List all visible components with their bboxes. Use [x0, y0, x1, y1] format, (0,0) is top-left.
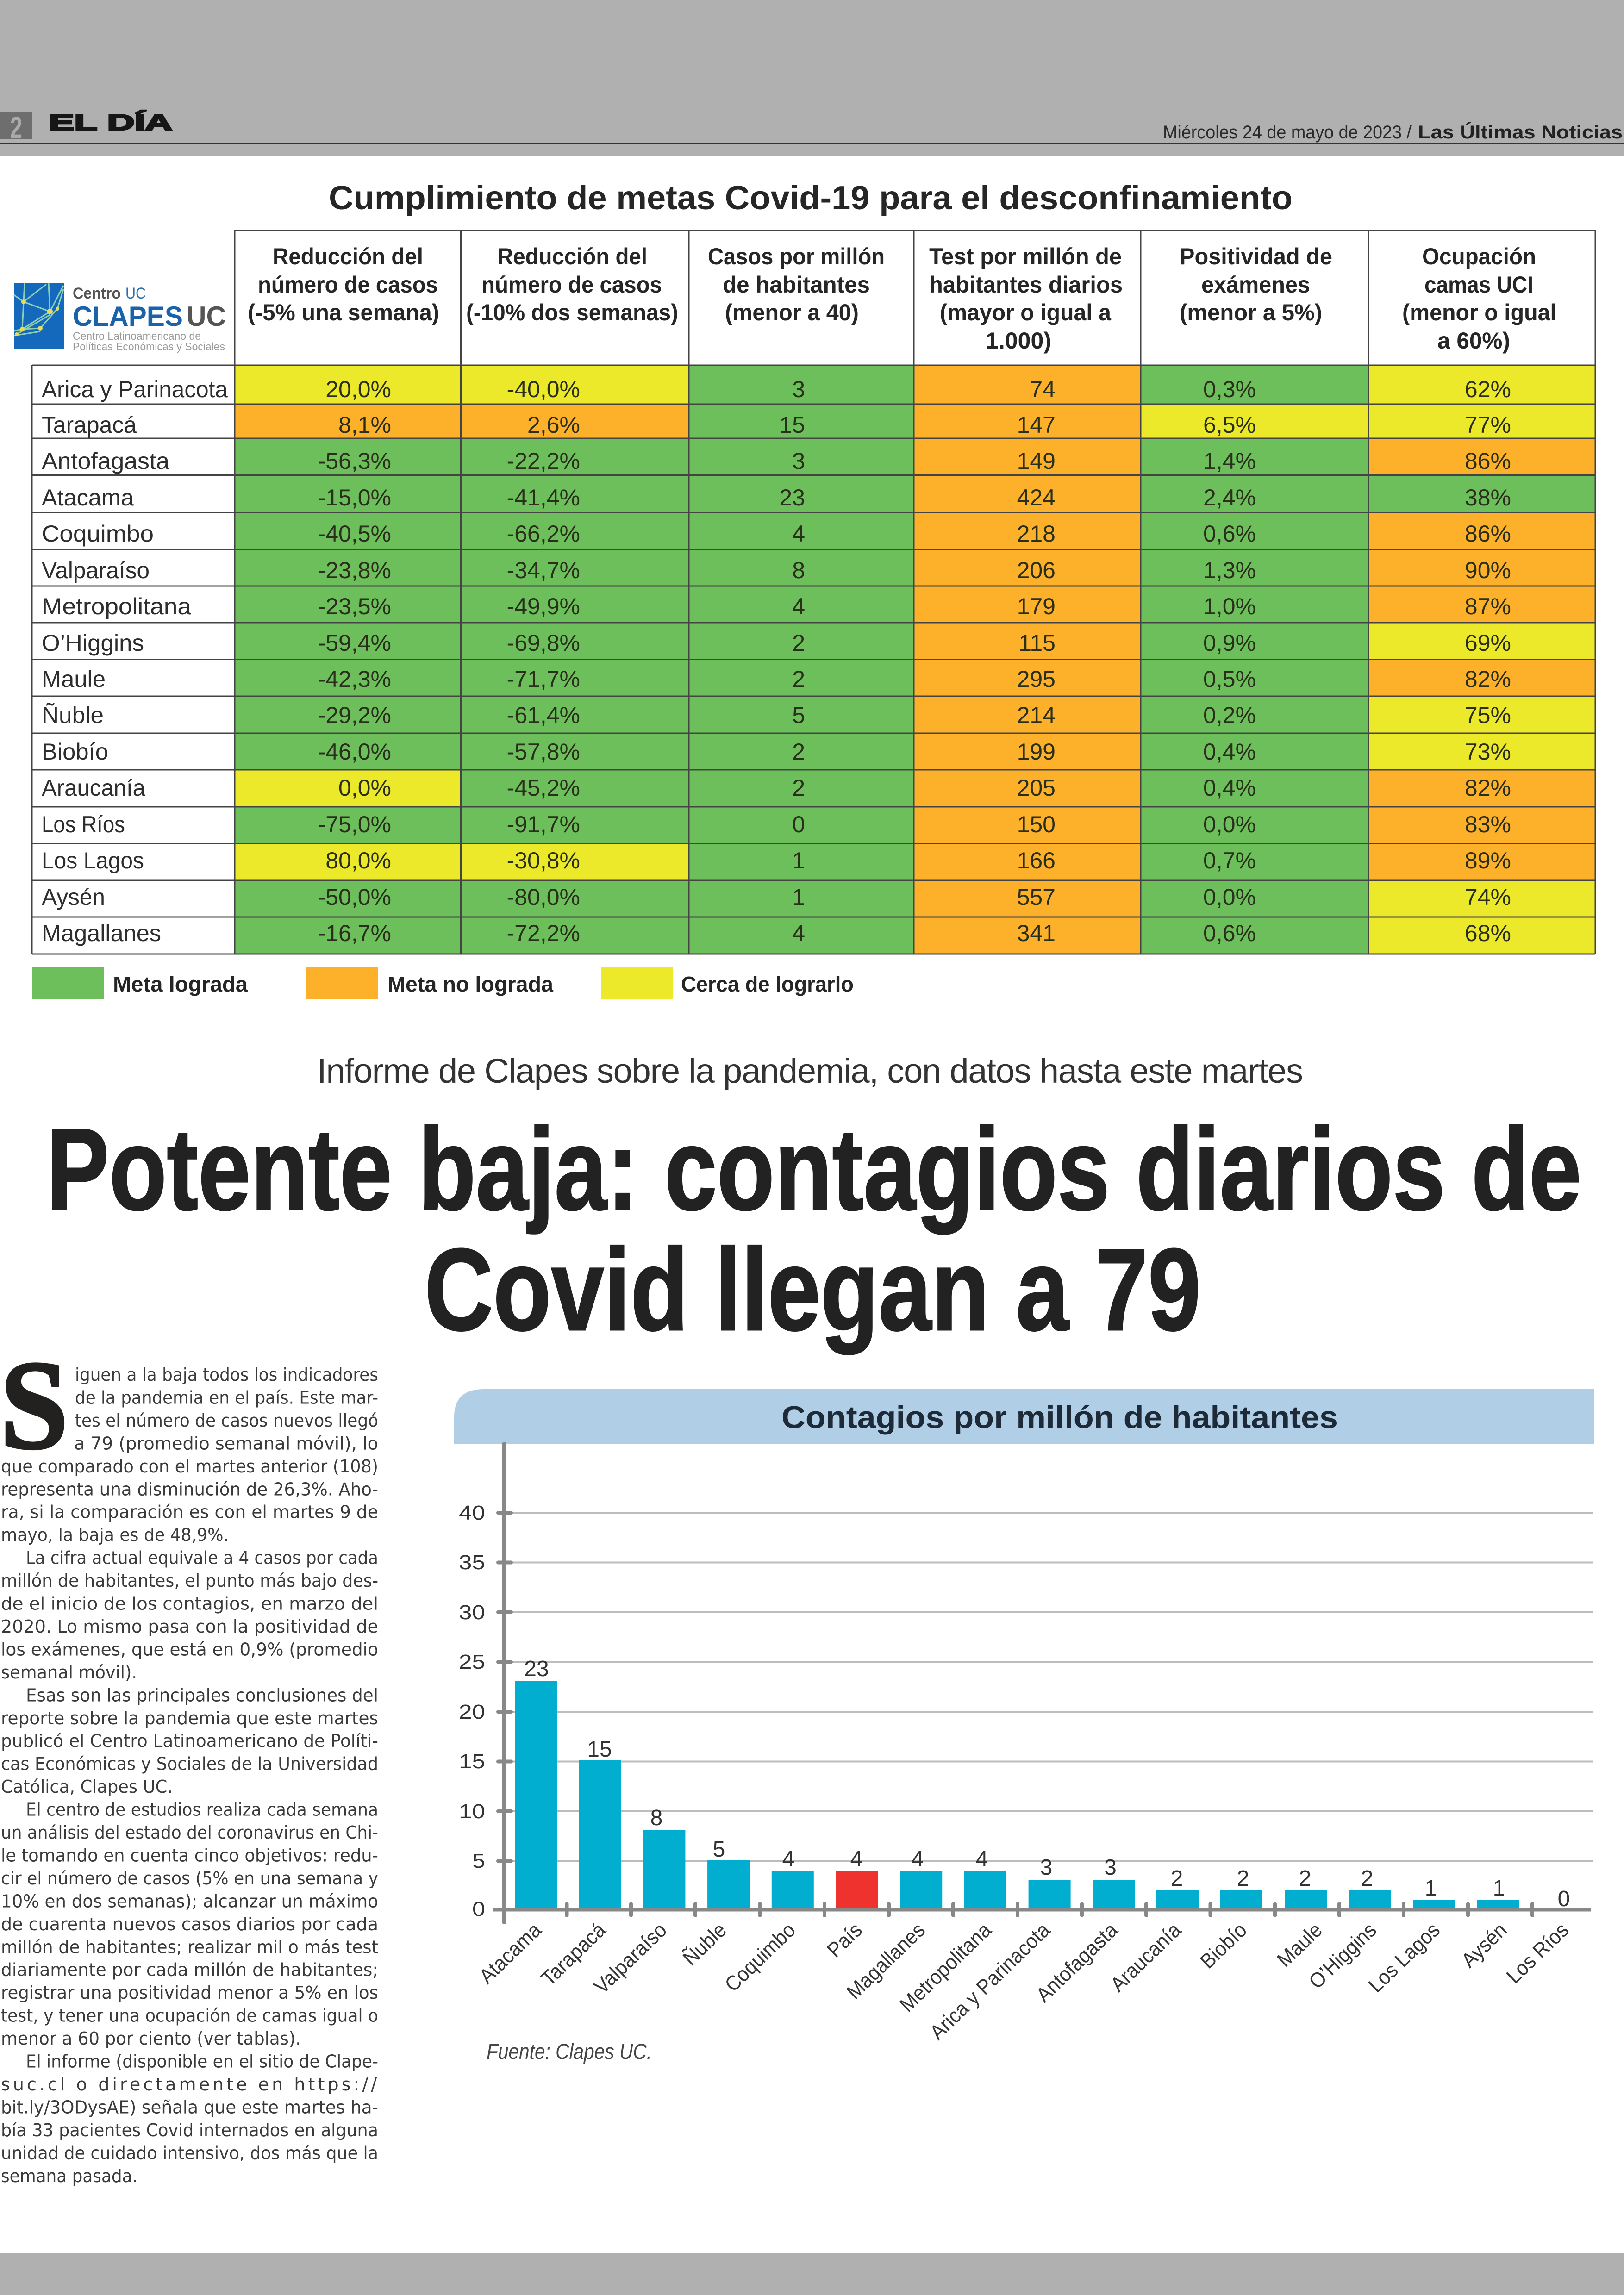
x axis category labels: País [823, 1919, 867, 1962]
header: casos por millón: Casos por millón [708, 243, 885, 269]
row: Coquimbo: -40,5% [318, 521, 391, 547]
row: Magallanes: Magallanes [42, 920, 161, 946]
logo text: Centro [73, 285, 121, 302]
bar value labels: 4 [782, 1847, 794, 1871]
date and newspaper: Miércoles 24 de mayo de 2023 / [1163, 122, 1412, 143]
article text: cir el número de casos (5% en una semana y [1, 1868, 378, 1889]
x axis category labels: Los Ríos [1502, 1919, 1573, 1988]
article text: unidad de cuidado intensivo, dos más que la [1, 2143, 378, 2163]
y axis labels: 15 [459, 1750, 485, 1773]
header: ocupación UCI: camas UCI [1424, 272, 1533, 298]
row: Biobío [42, 733, 1595, 770]
row: Ñuble: 75% [1465, 702, 1511, 728]
bar value labels: 3 [1104, 1855, 1117, 1880]
row: Maule [42, 659, 1595, 696]
row: Arica y Parinacota: 74 [1030, 376, 1056, 402]
row: Tarapacá: 15 [779, 412, 805, 438]
row: Maule: 82% [1465, 666, 1511, 692]
bar value labels: 4 [912, 1847, 924, 1871]
legend: meta no lograda [306, 967, 553, 999]
row: Valparaíso: 1,3% [1203, 557, 1256, 583]
row: Arica y Parinacota: 62% [1465, 376, 1511, 402]
bar value labels: 4 [976, 1847, 988, 1871]
bar value labels: 23 [524, 1657, 549, 1681]
bar value labels: 3 [1040, 1855, 1052, 1880]
row: Aysén: 74% [1465, 884, 1511, 910]
article text: El centro de estudios realiza cada semana [26, 1800, 378, 1820]
logo text [73, 285, 226, 353]
row: Arica y Parinacota: 20,0% [325, 376, 391, 402]
article text: tes el número de casos nuevos llegó [75, 1410, 378, 1431]
row: Aysén: 0,0% [1203, 884, 1256, 910]
article text: un análisis del estado del coronavirus en Chi- [1, 1822, 378, 1843]
article text: 2020. Lo mismo pasa con la positividad de [1, 1616, 378, 1637]
row: Biobío: -46,0% [318, 739, 391, 765]
row: Coquimbo: -66,2% [507, 521, 580, 547]
bar value labels: 15 [587, 1737, 612, 1762]
row: Araucanía [42, 770, 1595, 807]
x axis category labels: Biobío [1196, 1919, 1251, 1973]
row: O'Higgins: O’Higgins [42, 630, 144, 656]
legend: meta lograda: Meta lograda [113, 972, 248, 996]
row: Los Ríos: 0 [792, 811, 805, 837]
row: Tarapacá: 147 [1017, 412, 1056, 438]
row: Valparaíso: 8 [792, 557, 805, 583]
bar value labels: 1 [1425, 1876, 1437, 1901]
y axis labels: 25 [459, 1651, 485, 1673]
row: Arica y Parinacota [42, 365, 1595, 404]
header: test por millón: habitantes diarios [929, 272, 1123, 298]
row: Valparaíso: 90% [1465, 557, 1511, 583]
row: Los Lagos: 166 [1017, 848, 1056, 873]
row: O'Higgins: 69% [1465, 630, 1511, 656]
article text: que comparado con el martes anterior (108) [1, 1456, 378, 1477]
header: ocupación UCI [1402, 243, 1556, 354]
y axis labels: 30 [459, 1601, 485, 1624]
row: Magallanes [42, 917, 1595, 954]
row: Ñuble [42, 696, 1595, 733]
article text: test, y tener una ocupación de camas igual o [1, 2006, 378, 2026]
row: Magallanes: -72,2% [507, 920, 580, 946]
header: test por millón: 1.000) [986, 328, 1051, 354]
article text: iguen a la baja todos los indicadores [75, 1365, 378, 1385]
article text: suc.cl o directamente en https:// [1, 2074, 377, 2095]
row: Antofagasta: 149 [1017, 448, 1056, 474]
x axis category labels [475, 1918, 1573, 2044]
row: Los Ríos: -75,0% [318, 811, 391, 837]
x axis category labels: Araucanía [1106, 1918, 1186, 1996]
logo text: UC [187, 301, 226, 332]
row: Valparaíso: -34,7% [507, 557, 580, 583]
row: Metropolitana [42, 586, 1595, 623]
x axis category labels: Atacama [475, 1918, 546, 1988]
row: Tarapacá: Tarapacá [42, 412, 137, 438]
row: Los Ríos: 83% [1465, 811, 1511, 837]
table title: Cumplimiento de metas Covid-19 para el desconfinamiento [329, 180, 1293, 217]
bars [515, 1681, 1519, 1911]
row: Biobío: 199 [1017, 739, 1056, 765]
header: reducción dos semanas [466, 243, 678, 325]
row: Aysén: -80,0% [507, 884, 580, 910]
y axis labels: 0 [472, 1898, 485, 1921]
row: Maule: Maule [42, 666, 106, 692]
row: Metropolitana: 87% [1465, 593, 1511, 619]
row: Coquimbo: 4 [792, 521, 805, 547]
bottom band [0, 2253, 1624, 2295]
article text: de el inicio de los contagios, en marzo del [1, 1593, 378, 1614]
row: Maule: 295 [1017, 666, 1056, 692]
row: Ñuble: 0,2% [1203, 702, 1256, 728]
x axis category labels: Magallanes [843, 1919, 930, 2004]
row: Biobío: -57,8% [507, 739, 580, 765]
row: O'Higgins: -69,8% [507, 630, 580, 656]
y axis labels: 20 [459, 1701, 485, 1723]
bar value labels: 4 [850, 1847, 862, 1871]
row: Los Lagos: 1 [792, 848, 805, 873]
row: Metropolitana: 1,0% [1203, 593, 1256, 619]
row: Metropolitana: 4 [792, 593, 805, 619]
row: Antofagasta: 86% [1465, 448, 1511, 474]
row: Valparaíso: 206 [1017, 557, 1056, 583]
header: reducción dos semanas: (-10% dos semanas) [466, 299, 678, 325]
header: ocupación UCI: Ocupación [1422, 243, 1536, 269]
article text: bit.ly/3ODysAE) señala que este martes ha- [1, 2097, 378, 2117]
row: Maule: 2 [792, 666, 805, 692]
table panel [32, 231, 1595, 954]
row: Los Lagos: Los Lagos [42, 848, 144, 873]
row: Coquimbo: 86% [1465, 521, 1511, 547]
article text: El informe (disponible en el sitio de Clape- [26, 2052, 378, 2072]
row: Magallanes: 341 [1017, 920, 1056, 946]
row: Biobío: 0,4% [1203, 739, 1256, 765]
x axis category labels: Metropolitana [895, 1918, 996, 2017]
x axis category labels: Valparaíso [590, 1919, 671, 1998]
row: Atacama: 424 [1017, 485, 1056, 511]
header: ocupación UCI: a 60%) [1437, 328, 1510, 354]
row: Atacama: 23 [779, 485, 805, 511]
article text: le tomando en cuenta cinco objetivos: redu- [1, 1845, 378, 1865]
row: Araucanía: 205 [1017, 775, 1056, 801]
article text [0, 1335, 378, 2186]
y axis labels: 10 [459, 1800, 485, 1823]
row: Maule: -42,3% [318, 666, 391, 692]
row: O'Higgins: -59,4% [318, 630, 391, 656]
row: Metropolitana: 179 [1017, 593, 1056, 619]
header: test por millón [929, 243, 1123, 354]
row: O'Higgins [42, 623, 1595, 659]
row: Ñuble: 214 [1017, 702, 1056, 728]
date and newspaper: Las Últimas Noticias [1418, 121, 1623, 143]
row: Antofagasta [42, 438, 1595, 475]
row: Tarapacá: 2,6% [527, 412, 580, 438]
row: Magallanes: -16,7% [318, 920, 391, 946]
header: casos por millón [708, 243, 885, 325]
x axis category labels: O’Higgins [1305, 1919, 1381, 1993]
row: Biobío: 2 [792, 739, 805, 765]
header: test por millón: Test por millón de [929, 243, 1122, 269]
bar value labels: 2 [1361, 1866, 1373, 1891]
article text: mayo, la baja es de 48,9%. [1, 1525, 229, 1545]
article text: ra, si la comparación es con el martes 9 de [1, 1502, 378, 1522]
row: Atacama: 2,4% [1203, 485, 1256, 511]
article text: cas Económicas y Sociales de la Universidad [1, 1754, 378, 1774]
logo text: UC [125, 285, 146, 302]
bar value labels: 0 [1558, 1887, 1570, 1911]
row: Los Lagos [42, 843, 1595, 880]
article text: representa una disminución de 26,3%. Aho- [1, 1479, 378, 1499]
header: reducción una semana: Reducción del [273, 243, 423, 269]
legend: meta no lograda: Meta no lograda [387, 972, 553, 996]
chart title band [454, 1389, 1594, 1444]
row: Tarapacá: 8,1% [338, 412, 391, 438]
row: Antofagasta: Antofagasta [42, 448, 169, 474]
row: Maule: 0,5% [1203, 666, 1256, 692]
article text: reporte sobre la pandemia que este martes [1, 1708, 378, 1728]
article text: millón de habitantes; realizar mil o más test [1, 1937, 378, 1957]
row: Ñuble: Ñuble [42, 702, 104, 728]
row: Coquimbo [42, 513, 1595, 549]
logo: Clapes UC [14, 283, 226, 353]
article text: publicó el Centro Latinoamericano de Políti- [1, 1731, 378, 1751]
article text: La cifra actual equivale a 4 casos por cada [26, 1548, 378, 1568]
x axis category labels: Los Lagos [1364, 1919, 1444, 1997]
article text: Esas son las principales conclusiones del [26, 1685, 378, 1705]
row: Antofagasta: -56,3% [318, 448, 391, 474]
article text: semana pasada. [1, 2166, 137, 2186]
bar value labels: 5 [713, 1837, 725, 1862]
legend: cerca de lograrlo [601, 967, 854, 999]
row: Arica y Parinacota: Arica y Parinacota [42, 376, 228, 402]
axes and ticks [493, 1444, 1591, 1922]
x axis category labels: Aysén [1457, 1919, 1512, 1972]
header: reducción una semana: número de casos [258, 272, 438, 298]
x axis category labels: Ñuble [678, 1918, 731, 1970]
header: reducción una semana [248, 243, 439, 325]
row: Los Ríos: Los Ríos [42, 811, 125, 837]
drop cap: S [0, 1335, 69, 1476]
row: Los Lagos: 80,0% [325, 848, 391, 873]
row: O'Higgins: 0,9% [1203, 630, 1256, 656]
row: O'Higgins: 115 [1018, 630, 1056, 656]
row: Tarapacá: 6,5% [1203, 412, 1256, 438]
y axis grid [504, 1513, 1593, 1861]
x axis category labels: Tarapacá [537, 1918, 611, 1990]
article text: 10% en dos semanas); alcanzar un máximo [1, 1891, 378, 1911]
y axis labels: 35 [459, 1551, 485, 1574]
article text: menor a 60 por ciento (ver tablas). [1, 2028, 301, 2049]
row: Los Ríos: 150 [1017, 811, 1056, 837]
row: Los Lagos: 89% [1465, 848, 1511, 873]
bar value labels [524, 1657, 1570, 1911]
row: Maule: -71,7% [507, 666, 580, 692]
header: reducción dos semanas: Reducción del [497, 243, 647, 269]
row: Araucanía: 0,4% [1203, 775, 1256, 801]
bar value labels: 2 [1299, 1866, 1311, 1891]
row: Atacama: -15,0% [318, 485, 391, 511]
x axis category labels: Coquimbo [720, 1919, 800, 1996]
row: Magallanes: 68% [1465, 920, 1511, 946]
header: casos por millón: (menor a 40) [725, 299, 859, 325]
row: Magallanes: 4 [792, 920, 805, 946]
row: Araucanía: Araucanía [42, 775, 145, 801]
bar value labels: 2 [1171, 1866, 1183, 1891]
icon: network square [14, 283, 64, 349]
article text: semanal móvil). [1, 1662, 137, 1683]
headline [46, 1104, 1581, 1355]
article text: de la pandemia en el país. Este mar- [75, 1388, 378, 1408]
x axis category labels: Maule [1273, 1919, 1327, 1972]
chart panel: contagios por millón de habitantes [454, 1389, 1594, 2064]
row: Metropolitana: -49,9% [507, 593, 580, 619]
row: Aysén: -50,0% [318, 884, 391, 910]
row: Biobío: Biobío [42, 739, 108, 765]
bar value labels: 8 [650, 1806, 662, 1830]
header: reducción una semana: (-5% una semana) [248, 299, 439, 325]
row: Coquimbo: Coquimbo [42, 521, 154, 547]
header: test por millón: (mayor o igual a [940, 299, 1112, 325]
row: Coquimbo: 218 [1017, 521, 1056, 547]
legend [32, 967, 854, 999]
row: Ñuble: -61,4% [507, 702, 580, 728]
article text: Católica, Clapes UC. [1, 1777, 173, 1797]
subheading: Informe de Clapes sobre la pandemia, con datos hasta este martes [317, 1052, 1303, 1090]
row: Magallanes: 0,6% [1203, 920, 1256, 946]
row: Aysén: 557 [1017, 884, 1056, 910]
row: Biobío: 73% [1465, 739, 1511, 765]
row: Los Lagos: -30,8% [507, 848, 580, 873]
source note: Fuente: Clapes UC. [487, 2039, 652, 2064]
page number [0, 110, 32, 144]
row: Tarapacá [42, 404, 1595, 438]
logo text: Políticas Económicas y Sociales [73, 341, 225, 353]
logo text: CLAPES [73, 301, 183, 332]
row: Antofagasta: 1,4% [1203, 448, 1256, 474]
y axis labels: 40 [459, 1502, 485, 1524]
row: Atacama: -41,4% [507, 485, 580, 511]
bar value labels: 1 [1493, 1876, 1505, 1901]
top header band [0, 0, 1624, 156]
row: Atacama: Atacama [42, 485, 134, 511]
row: O'Higgins: 2 [792, 630, 805, 656]
row: Aysén: 1 [792, 884, 805, 910]
row: Tarapacá: 77% [1465, 412, 1511, 438]
header: reducción dos semanas: número de casos [481, 272, 662, 298]
row: Arica y Parinacota: -40,0% [507, 376, 580, 402]
row: Los Lagos: 0,7% [1203, 848, 1256, 873]
x axis category labels: Antofagasta [1032, 1918, 1123, 2007]
article text: los exámenes, que está en 0,9% (promedio [1, 1639, 378, 1659]
row: Araucanía: -45,2% [507, 775, 580, 801]
row: Los Ríos: -91,7% [507, 811, 580, 837]
header: casos por millón: de habitantes [723, 272, 870, 298]
row: Los Ríos [42, 807, 1595, 843]
header: positividad [1180, 243, 1332, 325]
row: Antofagasta: -22,2% [507, 448, 580, 474]
row: Atacama [42, 475, 1595, 513]
chart title band: Contagios por millón de habitantes [781, 1400, 1338, 1435]
row: Araucanía: 0,0% [338, 775, 391, 801]
article text: millón de habitantes, el punto más bajo des- [1, 1571, 378, 1591]
row: Ñuble: 5 [792, 702, 805, 728]
row: Aysén [42, 880, 1595, 917]
y axis labels [459, 1502, 485, 1921]
date and newspaper [1163, 121, 1623, 143]
bar value labels: 2 [1237, 1866, 1249, 1891]
article text: registrar una positividad menor a 5% en los [1, 1983, 378, 2003]
row: Los Ríos: 0,0% [1203, 811, 1256, 837]
x axis category labels: Arica y Parinacota [925, 1918, 1055, 2044]
row: Valparaíso [42, 549, 1595, 586]
article text: diariamente por cada millón de habitantes; [1, 1960, 378, 1980]
column headers [235, 231, 1595, 365]
article text: a 79 (promedio semanal móvil), lo [74, 1433, 378, 1453]
row: Valparaíso: Valparaíso [42, 557, 150, 583]
page number: 2 [10, 110, 22, 144]
row: Aysén: Aysén [42, 884, 105, 910]
row: Arica y Parinacota: 0,3% [1203, 376, 1256, 402]
row: Arica y Parinacota: 3 [792, 376, 805, 402]
row: Ñuble: -29,2% [318, 702, 391, 728]
header: positividad: Positividad de [1180, 243, 1332, 269]
article text: de cuarenta nuevos casos diarios por cada [1, 1914, 378, 1934]
row: Metropolitana: Metropolitana [42, 593, 191, 619]
row: Atacama: 38% [1465, 485, 1511, 511]
legend: meta lograda [32, 967, 248, 999]
row: Araucanía: 2 [792, 775, 805, 801]
article text: bía 33 pacientes Covid internados en alguna [1, 2120, 378, 2140]
y axis labels: 5 [472, 1850, 485, 1872]
header: positividad: exámenes [1201, 272, 1310, 298]
legend: cerca de lograrlo: Cerca de lograrlo [681, 972, 854, 996]
row: Metropolitana: -23,5% [318, 593, 391, 619]
header: ocupación UCI: (menor o igual [1402, 299, 1556, 325]
row: Araucanía: 82% [1465, 775, 1511, 801]
header: positividad: (menor a 5%) [1180, 299, 1322, 325]
section name: EL DÍA [49, 110, 172, 135]
row: Coquimbo: 0,6% [1203, 521, 1256, 547]
row: Antofagasta: 3 [792, 448, 805, 474]
headline: Covid llegan a 79 [425, 1225, 1201, 1355]
logo text: Centro Latinoamericano de [73, 330, 201, 343]
row: Valparaíso: -23,8% [318, 557, 391, 583]
